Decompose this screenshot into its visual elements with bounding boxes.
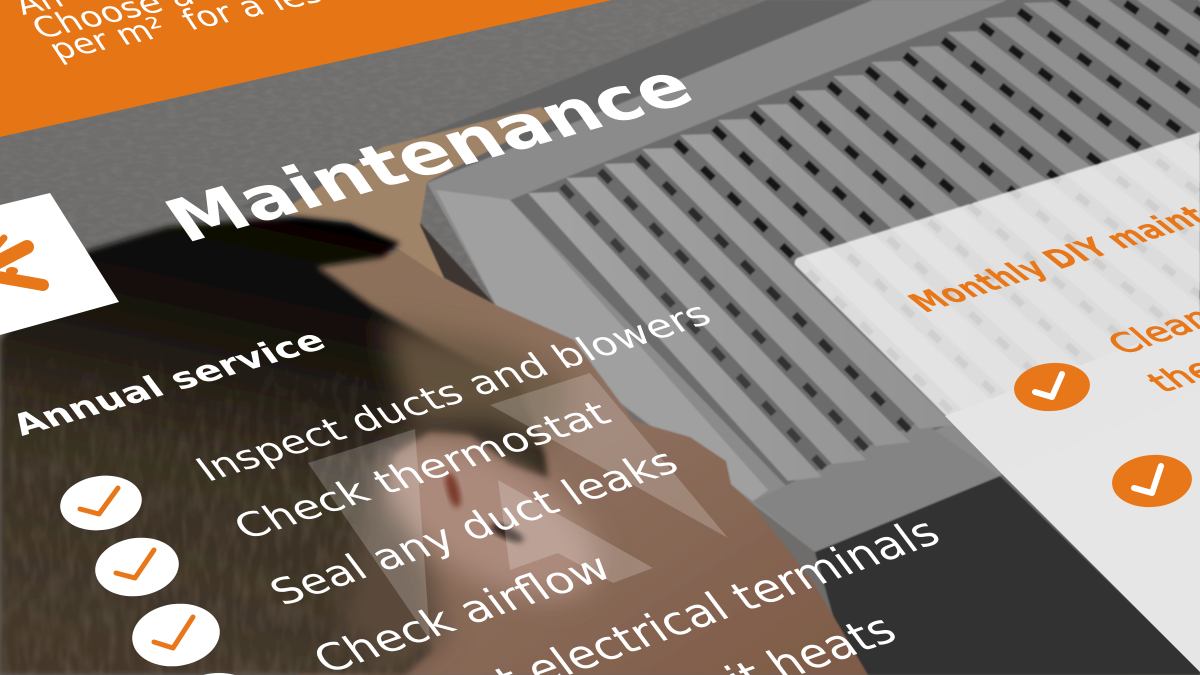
checklist: annual service: Check thermostat: [225, 393, 618, 547]
panel lower area: [1003, 391, 1200, 672]
check icon: orange circle 1: [1012, 360, 1092, 414]
icon: tools on white square: [0, 193, 119, 335]
checklist: annual service: [188, 294, 950, 675]
checklist: annual service: Inspect ducts and blowers: [188, 294, 719, 489]
vent inner recess: [510, 0, 1200, 490]
dark wall below vent: [815, 476, 1200, 675]
vent frame: [427, 0, 1200, 552]
shadow behind thumb: [410, 223, 497, 307]
check icons: white circles: [57, 471, 265, 675]
hand and thumb: [280, 107, 555, 280]
orange panel: [0, 0, 612, 137]
panel: monthly DIY maintenance: [795, 132, 1200, 672]
checklist: annual service: Seal any duct leaks: [261, 441, 687, 614]
vent slots: [562, 0, 1200, 471]
wall edge band: [240, 0, 873, 215]
head and face: [200, 250, 868, 675]
skin fading into hair below the ear: [340, 470, 445, 675]
vent lower rail: [753, 421, 1000, 552]
vent left bevel: [436, 190, 768, 501]
hair: [0, 217, 548, 675]
ear: [359, 411, 621, 629]
subheading: Annual service: Annual service: [3, 322, 333, 442]
translucent logo triangles: [308, 373, 728, 640]
heading: Maintenance: Maintenance: [151, 50, 707, 256]
lighter hair near the temple: [380, 320, 570, 450]
vent louvre slats: [528, 0, 1200, 481]
check icon: orange circle 2: [1110, 452, 1194, 510]
